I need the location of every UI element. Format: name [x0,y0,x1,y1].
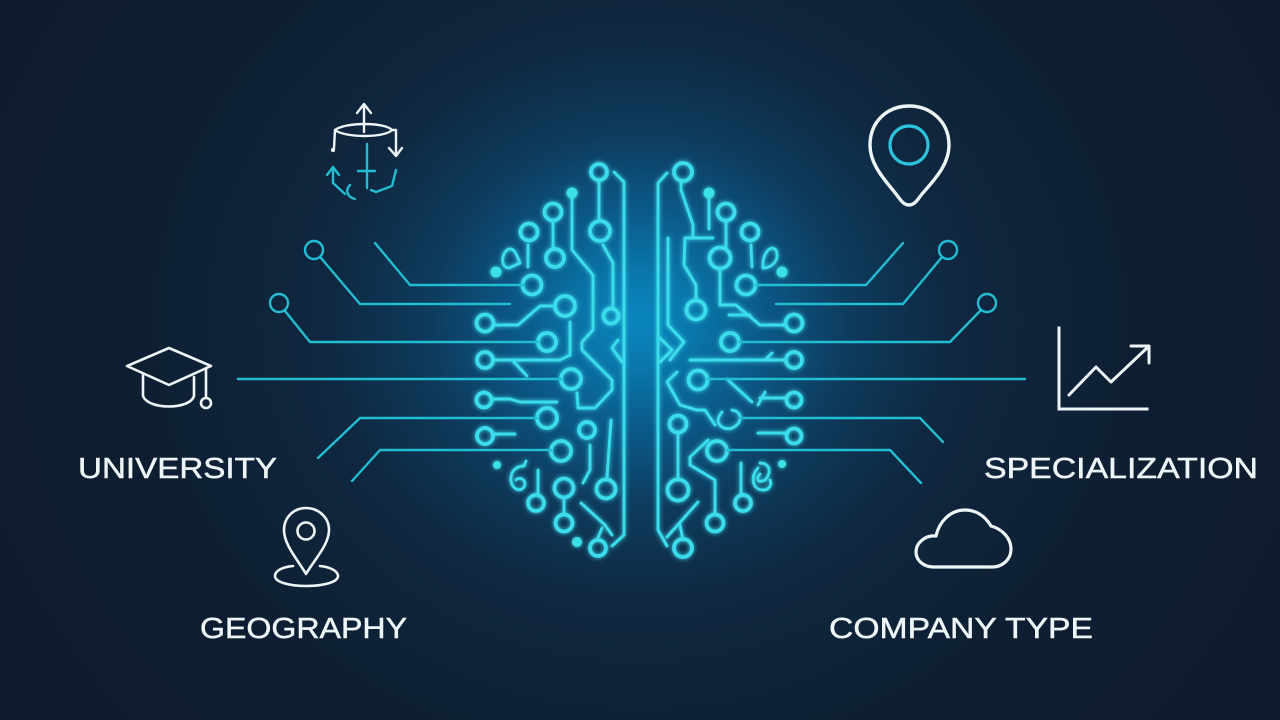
label: University: UNIVERSITY [78,453,277,485]
icon: line chart [1059,328,1149,409]
circuit brain: left hemisphere [476,164,624,556]
circuit brain: right hemisphere [658,163,802,557]
label: Company Type: COMPANY TYPE [829,613,1093,645]
icon: graduation cap [127,348,211,408]
icon: branching arrows [327,104,402,199]
icon: map pin on base [275,508,338,586]
label: Specialization: SPECIALIZATION [984,453,1258,485]
connector lines: right [708,241,1025,483]
icon: location pin [870,106,949,205]
label: Geography: GEOGRAPHY [200,613,407,645]
icon: cloud [916,510,1011,567]
connector lines: left [238,241,561,481]
